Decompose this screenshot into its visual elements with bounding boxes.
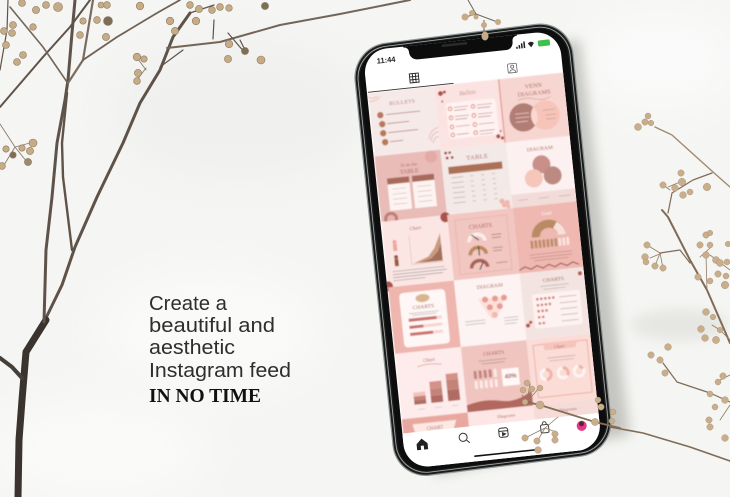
post: table: TABLE (466, 153, 489, 162)
post: to do list table (375, 150, 448, 227)
notch (402, 34, 517, 60)
post: funnel diagram (454, 274, 526, 347)
icon: grid tab (409, 73, 419, 83)
post: bar chart (395, 347, 468, 419)
left tree buds (0, 0, 269, 169)
post: gauge charts: CHARTS (469, 223, 492, 231)
post: chart banner: CHART (427, 425, 444, 432)
post: chart banner (402, 412, 469, 435)
post: bullets: BULLETS (389, 98, 416, 107)
post: partial script (533, 398, 599, 420)
post: people charts: CHARTS (483, 350, 505, 358)
post: charts card: CHARTS (412, 303, 435, 311)
icon: shop (540, 421, 549, 433)
left tree (0, 0, 410, 497)
icon: search (459, 433, 470, 444)
post: venn diagrams: DIAGRAMS (517, 88, 551, 99)
post: diagram script (468, 405, 535, 429)
feed grid (363, 72, 601, 436)
post: bullets (368, 86, 440, 157)
headline text: Create a (149, 293, 228, 315)
icon: tagged tab (507, 63, 517, 73)
headline text: Instagram feed (149, 360, 291, 382)
post: bullets script (434, 79, 506, 150)
icon: reels (498, 428, 508, 438)
headline text: IN NO TIME (149, 386, 261, 407)
post: people charts (461, 340, 533, 412)
post: funnel diagram: DIAGRAM (476, 283, 503, 291)
headline text: beautiful and (149, 315, 275, 337)
status bar icons (516, 39, 550, 49)
screen (358, 28, 604, 472)
post: to do list table: TABLE (400, 168, 419, 176)
post: donut charts (526, 333, 599, 405)
speaker (441, 42, 468, 47)
top twig over phone (462, 0, 501, 40)
post: chart area: Chart (409, 226, 422, 232)
post: venn diagrams: VENN (524, 82, 543, 91)
post: to do list table: To do list (400, 161, 418, 168)
icon: home (416, 438, 428, 450)
post: charts card (388, 280, 461, 354)
home indicator (474, 449, 536, 457)
status bar time: 11:44 (376, 55, 397, 66)
post: people charts: 40% (504, 374, 518, 381)
post: dot charts: CHARTS (543, 276, 564, 284)
post: chart area (376, 212, 457, 292)
headline text: aesthetic (149, 337, 235, 359)
navigation bar (402, 413, 600, 466)
post: arch chart: Goal (541, 211, 552, 217)
post: donut charts: Chart (554, 343, 566, 349)
post: arch chart (513, 201, 585, 274)
post: bar chart: Chart (423, 358, 436, 364)
phone (351, 20, 615, 480)
post: table (440, 143, 513, 215)
post: venn diagrams (499, 72, 572, 143)
post: diagram (506, 136, 578, 208)
headline text (149, 293, 291, 407)
post: diagram script: Diagrams (496, 413, 516, 420)
post: partial script: Diagrams (558, 406, 577, 413)
right tree buds (520, 113, 730, 453)
post: dot charts (520, 267, 592, 340)
right tree (522, 127, 730, 461)
post: diagram: DIAGRAM (527, 145, 553, 154)
phone body (351, 20, 615, 480)
post: gauge charts (447, 208, 520, 280)
icon: avatar (576, 420, 587, 431)
tab underline (368, 83, 454, 93)
phone shadow (395, 40, 630, 475)
post: bullets script: Bullets (459, 90, 477, 98)
